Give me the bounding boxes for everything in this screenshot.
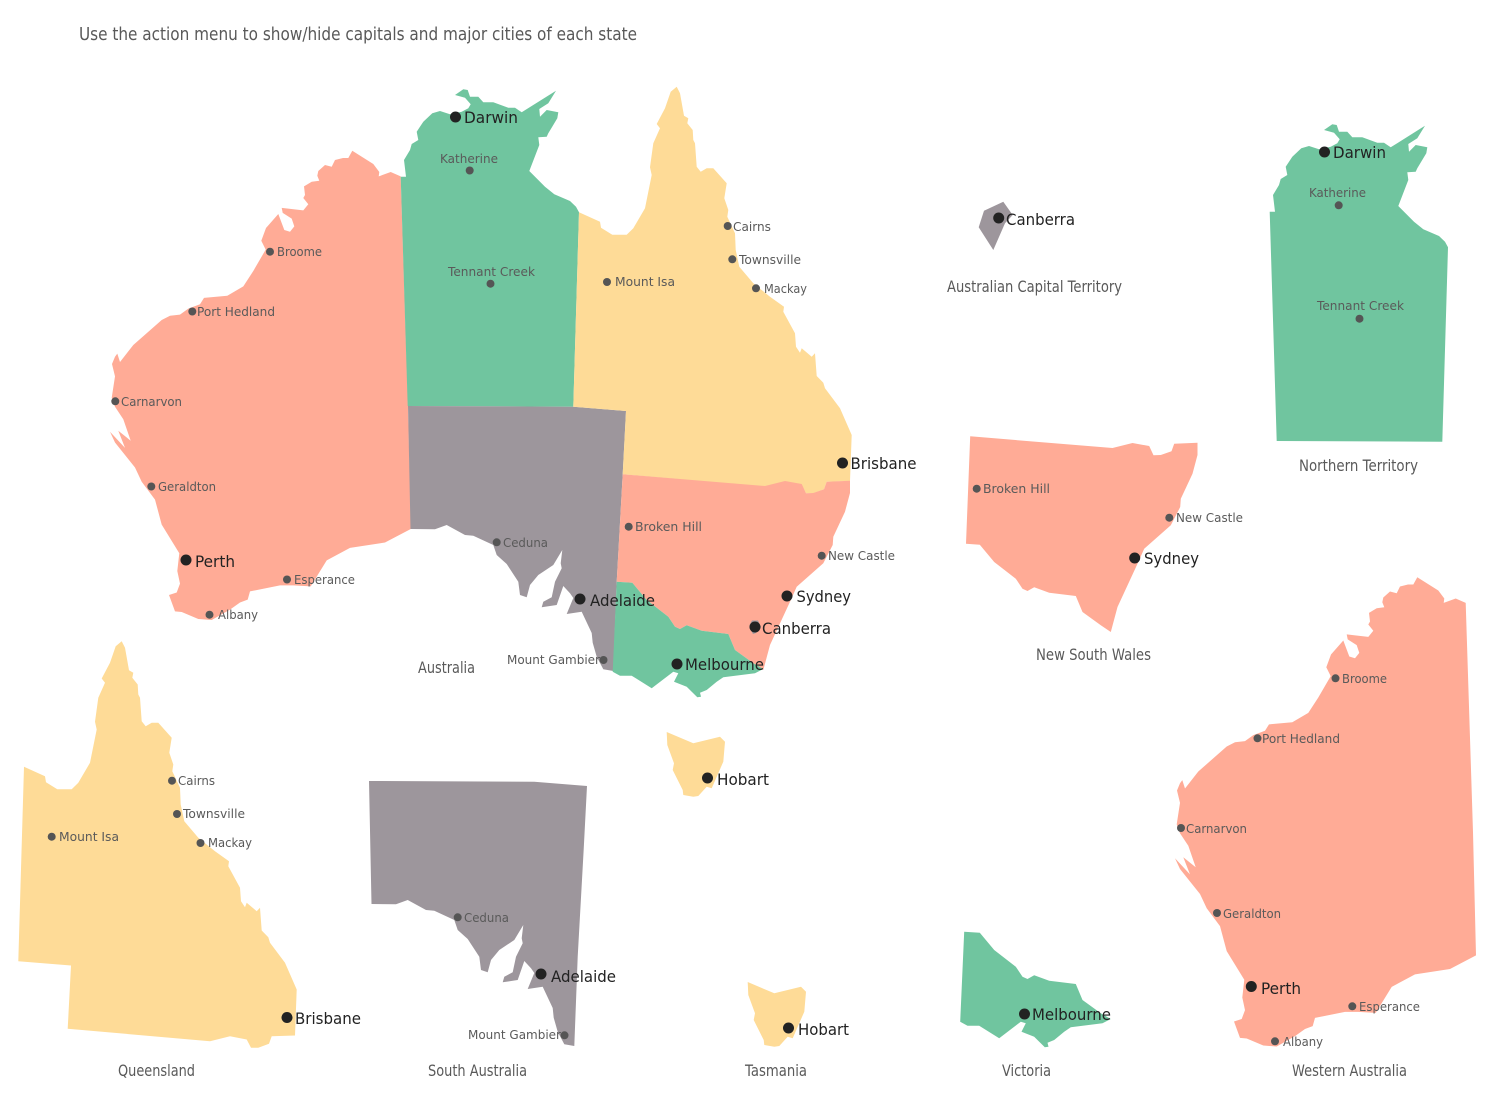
panel: Western Australia [1175, 577, 1476, 1080]
city: Hobart: Hobart [798, 1020, 849, 1039]
city: Albany: Albany [1283, 1035, 1323, 1049]
panel: New South Wales [966, 436, 1243, 664]
city: Geraldton: Geraldton [158, 480, 216, 494]
NT shape [1270, 124, 1448, 442]
city: Sydney: Sydney [1144, 549, 1199, 568]
city: Esperance: Esperance [294, 573, 355, 587]
label: Australian Capital Territory: Australian Capital Territory [947, 277, 1122, 296]
label: New South Wales: New South Wales [1036, 645, 1151, 664]
label: Victoria: Victoria [1002, 1061, 1051, 1080]
label: Australia: Australia [418, 658, 475, 677]
city: Tennant Creek: Tennant Creek [447, 265, 535, 279]
city: Katherine: Katherine [440, 152, 498, 166]
city: Darwin: Darwin [1333, 143, 1386, 162]
city: Brisbane: Brisbane [295, 1009, 361, 1028]
WA shape [1175, 577, 1476, 1046]
label: Northern Territory: Northern Territory [1299, 456, 1418, 475]
city: Katherine: Katherine [1309, 186, 1366, 200]
city: Townsville: Townsville [182, 807, 245, 821]
city: Esperance: Esperance [1359, 1000, 1420, 1014]
city: Brisbane: Brisbane [850, 454, 916, 473]
city: Cairns: Cairns [178, 774, 215, 788]
city: Canberra: Canberra [1006, 210, 1075, 229]
state shape: Australian Capital Territory [750, 620, 761, 634]
city: New Castle: New Castle [1176, 511, 1243, 525]
city: Broken Hill: Broken Hill [635, 520, 702, 534]
map: Australia [110, 87, 916, 797]
city: Mount Gambier: Mount Gambier [468, 1028, 561, 1042]
state shape: New South Wales [617, 474, 850, 670]
city: Adelaide: Adelaide [551, 967, 616, 986]
city: Tennant Creek [1316, 299, 1404, 323]
state shape: Tasmania [667, 732, 725, 797]
city: Broome: Broome [1342, 672, 1387, 686]
NSW shape [966, 436, 1198, 632]
state shape: Victoria [613, 582, 763, 697]
city: Port Hedland: Port Hedland [1262, 732, 1340, 746]
city: Melbourne: Melbourne [685, 655, 764, 674]
city: Ceduna: Ceduna [464, 911, 509, 925]
city: Perth: Perth [195, 552, 235, 571]
panel: Queensland [18, 641, 361, 1080]
city: New Castle: New Castle [828, 549, 895, 563]
city: Broome: Broome [277, 245, 322, 259]
city: Geraldton: Geraldton [1223, 907, 1281, 921]
city: Broken Hill: Broken Hill [983, 482, 1050, 496]
SA shape [369, 781, 587, 1046]
city: Cairns: Cairns [733, 220, 771, 234]
panel: Victoria [960, 932, 1111, 1080]
city: Melbourne: Melbourne [1032, 1005, 1111, 1024]
city: Carnarvon: Carnarvon [121, 395, 182, 409]
state shape: Queensland [573, 87, 852, 493]
panel: Australian Capital Territory [947, 202, 1122, 296]
Victoria shape [960, 932, 1111, 1047]
city: Mackay: Mackay [764, 282, 807, 296]
city: Carnarvon: Carnarvon [1186, 822, 1247, 836]
city: Perth: Perth [1261, 979, 1301, 998]
city: Darwin: Darwin [464, 108, 518, 127]
city: Katherine [1309, 186, 1366, 209]
city: Hobart: Hobart [717, 770, 769, 789]
city: Mount Gambier: Mount Gambier [507, 653, 600, 667]
state shape: Western Australia [110, 151, 411, 620]
label: South Australia: South Australia [428, 1061, 527, 1080]
city: Canberra: Canberra [762, 619, 831, 638]
panel: South Australia [369, 781, 616, 1080]
QLD shape [18, 641, 297, 1048]
city: Mount Isa: Mount Isa [615, 275, 675, 289]
city: Tennant Creek [447, 265, 535, 288]
state shape: Northern Territory [401, 89, 579, 407]
ACT shape [979, 202, 1013, 250]
label: Tasmania: Tasmania [744, 1061, 807, 1080]
city: Sydney: Sydney [796, 587, 851, 606]
city: Tennant Creek: Tennant Creek [1316, 299, 1404, 313]
panel: Tasmania [744, 982, 849, 1080]
city: Ceduna: Ceduna [503, 536, 548, 550]
city: Katherine [440, 152, 498, 174]
state shape: South Australia [408, 406, 626, 671]
label: Queensland: Queensland [118, 1061, 195, 1080]
Tasmania shape [748, 982, 806, 1047]
city: Mount Isa: Mount Isa [59, 830, 119, 844]
title: Use the action menu to show/hide capitals and major cities of each state [79, 24, 637, 45]
panel: Northern Territory [1270, 124, 1448, 475]
city: Port Hedland: Port Hedland [197, 305, 275, 319]
city: Albany: Albany [218, 608, 258, 622]
city: Mackay: Mackay [208, 836, 252, 850]
city: Townsville: Townsville [738, 253, 801, 267]
label: Western Australia: Western Australia [1292, 1061, 1407, 1080]
city: Adelaide: Adelaide [590, 591, 655, 610]
